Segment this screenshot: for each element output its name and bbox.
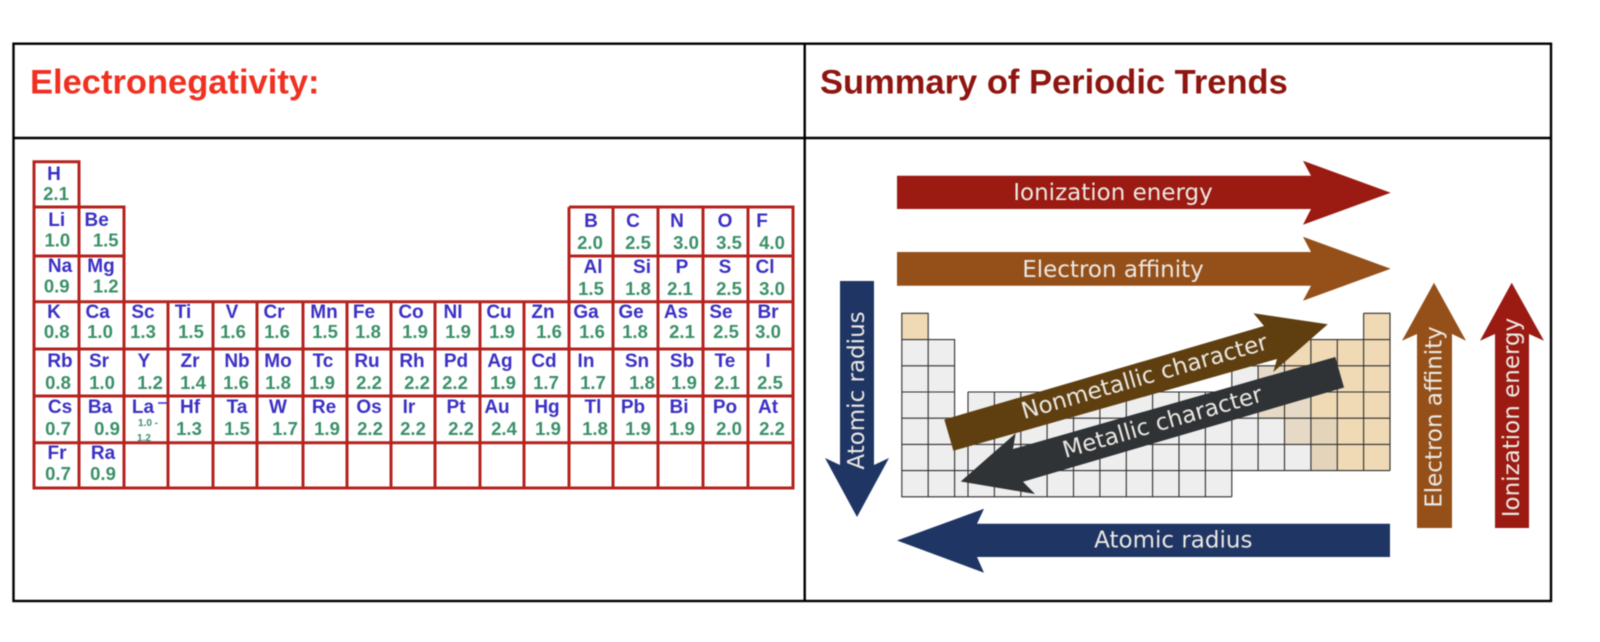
period 6 elements: 1.2 <box>137 433 151 444</box>
period 4 elements: Zn <box>531 302 555 323</box>
period 4 elements: 1.8 <box>355 321 381 342</box>
period 5 elements: Sb <box>670 351 694 372</box>
period 3 elements: 1.2 <box>93 276 119 297</box>
period 7 elements <box>45 443 116 484</box>
arrow: nonmetallic character <box>944 313 1328 451</box>
period 6 elements: 2.4 <box>491 418 518 439</box>
background periodic table grid <box>902 313 1390 497</box>
period 6 elements: Au <box>484 397 510 418</box>
period 3 elements: 1.5 <box>578 278 604 299</box>
period 4 elements: Se <box>709 302 733 323</box>
period 6 elements: 1.9 <box>669 418 695 439</box>
period 4 elements: Ti <box>175 302 191 323</box>
period 2 elements: O <box>718 211 732 232</box>
period 2 elements: Li <box>48 210 65 231</box>
period 4 elements: 1.5 <box>312 321 338 342</box>
period 6 elements <box>45 397 785 444</box>
period 6 elements: Po <box>713 397 737 418</box>
period 3 elements: 0.9 <box>44 276 70 297</box>
period 6 elements: Bi <box>670 397 688 418</box>
period 3 elements: 2.5 <box>716 278 742 299</box>
period 5 elements: 2.5 <box>757 372 783 393</box>
arrow: electron affinity vertical: Electron affinity <box>1422 326 1448 508</box>
period 5 elements: Ru <box>354 351 380 372</box>
period 5 elements: 1.0 <box>89 372 115 393</box>
period 5 elements: Sn <box>625 351 649 372</box>
period 2 elements: C <box>626 211 640 232</box>
period 4 elements: Ge <box>618 302 644 323</box>
period 6 elements: 2.0 <box>716 418 742 439</box>
period 2 elements: 4.0 <box>759 232 785 253</box>
period 3 elements: Al <box>584 257 602 278</box>
period 5 elements: Cd <box>531 351 557 372</box>
period 4 elements: NI <box>444 302 462 323</box>
period 4 elements: 0.8 <box>44 321 70 342</box>
period 2 elements: 3.0 <box>673 232 699 253</box>
heading: Summary of Periodic Trends: Summary of Periodic Trends <box>820 63 1288 101</box>
period 4 elements: Br <box>757 302 779 323</box>
arrow: atomic radius vertical: Atomic radius <box>844 311 870 470</box>
period 2 elements: 2.5 <box>625 232 651 253</box>
period 5 elements: In <box>578 351 594 372</box>
arrow: metallic character: Metallic character <box>1060 382 1266 464</box>
period 3 elements: 3.0 <box>759 278 785 299</box>
period 3 elements: 2.1 <box>667 278 693 299</box>
period 5 elements: 1.7 <box>533 372 559 393</box>
period 3 elements: P <box>676 257 689 278</box>
period 5 elements: Zr <box>180 351 200 372</box>
arrow: electron affinity vertical <box>1402 283 1466 528</box>
period 6 elements: 1.9 <box>625 418 651 439</box>
period 5 elements: 1.2 <box>137 372 163 393</box>
arrow: electron affinity horizontal: Electron affinity <box>1022 257 1204 283</box>
period 5 elements: 1.9 <box>490 372 516 393</box>
period 4 elements: 1.6 <box>579 321 605 342</box>
period 2 elements: N <box>670 211 684 232</box>
period 6 elements: Cs <box>48 397 72 418</box>
period 6 elements: 1.9 <box>535 418 561 439</box>
period 6 elements: 2.2 <box>400 418 426 439</box>
period 5 elements: 1.4 <box>180 372 207 393</box>
period 3 elements: Si <box>633 257 651 278</box>
panel: electronegativity periodic table <box>34 162 793 488</box>
period 5 elements: 0.8 <box>45 372 71 393</box>
period 2 elements: Be <box>85 210 109 231</box>
arrow: electron affinity horizontal <box>897 237 1391 301</box>
period 4 elements: 1.3 <box>130 321 156 342</box>
period 4 elements: 2.1 <box>669 321 695 342</box>
period 6 elements: Tl <box>585 397 601 418</box>
arrow: ionization energy horizontal: Ionization energy <box>1013 180 1213 206</box>
period 6 elements: 2.2 <box>357 418 383 439</box>
period 6 elements: 1.7 <box>272 418 298 439</box>
period 1 elements: 2.1 <box>43 183 69 204</box>
arrow: metallic character <box>961 357 1344 494</box>
period 5 elements: 1.9 <box>309 372 335 393</box>
period 6 elements: 2.2 <box>759 418 785 439</box>
period 7 elements: Fr <box>48 443 67 464</box>
period 4 elements: Cr <box>263 302 285 323</box>
period 6 elements: Ba <box>88 397 113 418</box>
period 6 elements: Ta <box>227 397 248 418</box>
period 5 elements: 2.1 <box>714 372 740 393</box>
period 4 elements: 1.6 <box>220 321 246 342</box>
period 6 elements: 1.0 - <box>138 418 158 429</box>
period 3 elements: 1.8 <box>625 278 651 299</box>
period 4 elements: 1.9 <box>445 321 471 342</box>
arrow: atomic radius horizontal <box>897 509 1390 573</box>
period 2 elements <box>44 210 785 253</box>
period 5 elements: Mo <box>264 351 292 372</box>
period 6 elements: La <box>132 397 155 418</box>
arrow: atomic radius horizontal: Atomic radius <box>1094 527 1252 553</box>
period 6 elements: 0.9 <box>94 418 120 439</box>
period 4 elements: 1.6 <box>264 321 290 342</box>
period 5 elements: 1.7 <box>580 372 606 393</box>
period 5 elements: 2.2 <box>404 372 430 393</box>
period 4 elements: V <box>226 302 239 323</box>
period 5 elements: Te <box>715 351 735 372</box>
period 3 elements: Mg <box>87 256 115 277</box>
period 4 elements: Co <box>398 302 424 323</box>
arrow: atomic radius vertical <box>825 281 889 517</box>
period 5 elements: Nb <box>224 351 250 372</box>
period 4 elements: Ga <box>573 302 599 323</box>
period 6 elements: Pb <box>621 397 645 418</box>
period 4 elements: 1.5 <box>178 321 204 342</box>
period 6 elements: 0.7 <box>45 418 71 439</box>
period 5 elements: 2.2 <box>356 372 382 393</box>
period 4 elements: K <box>47 302 61 323</box>
period 5 elements: Y <box>138 351 151 372</box>
period 4 elements: 1.8 <box>622 321 648 342</box>
panel: summary of periodic trends <box>825 161 1544 573</box>
period 6 elements: W <box>269 397 287 418</box>
period 6 elements: 2.2 <box>448 418 474 439</box>
period 5 elements: Tc <box>313 351 334 372</box>
period 4 elements: Mn <box>310 302 338 323</box>
table grid lines <box>34 162 793 488</box>
period 5 elements: Pd <box>444 351 468 372</box>
period 6 elements: 1.8 <box>582 418 608 439</box>
period 4 elements: Ca <box>86 302 110 323</box>
period 1 elements: H <box>47 164 61 185</box>
heading: Electronegativity: Electronegativity: <box>30 63 320 101</box>
arrow: ionization energy vertical: Ionization energy <box>1499 318 1525 517</box>
period 5 elements: 1.9 <box>671 372 697 393</box>
period 5 elements: Rb <box>47 351 73 372</box>
period 4 elements: Sc <box>131 302 155 323</box>
period 5 elements: 1.8 <box>629 372 655 393</box>
period 2 elements: B <box>584 211 598 232</box>
period 6 elements: 1.3 <box>176 418 202 439</box>
period 7 elements: 0.9 <box>90 463 116 484</box>
period 4 elements: 3.0 <box>755 321 781 342</box>
period 2 elements: 3.5 <box>716 232 742 253</box>
arrow: ionization energy horizontal <box>897 161 1391 225</box>
period 5 elements: I <box>765 351 771 372</box>
period 5 elements: Ag <box>487 351 513 372</box>
arrow: ionization energy vertical <box>1480 283 1544 528</box>
period 4 elements: Cu <box>486 302 512 323</box>
period 4 elements: 1.9 <box>489 321 515 342</box>
period 5 elements: 2.2 <box>442 372 468 393</box>
period 3 elements: Cl <box>756 257 774 278</box>
period 6 elements: 1.5 <box>224 418 250 439</box>
period 6 elements: Pt <box>446 397 466 418</box>
period 6 elements: 1.9 <box>314 418 340 439</box>
period 5 elements: 1.6 <box>223 372 249 393</box>
period 4 elements: Fe <box>353 302 375 323</box>
period 6 elements: At <box>758 397 779 418</box>
period 2 elements: 1.0 <box>44 230 70 251</box>
arrow: nonmetallic character: Nonmetallic character <box>1019 330 1271 425</box>
period 5 elements: 1.8 <box>265 372 291 393</box>
period 5 elements: Sr <box>89 351 110 372</box>
period 1 elements <box>43 164 69 204</box>
period 6 elements: Ir <box>403 397 416 418</box>
period 4 elements <box>44 302 781 342</box>
period 7 elements: 0.7 <box>45 463 71 484</box>
period 2 elements: 2.0 <box>577 232 603 253</box>
period 6 elements: Hf <box>180 397 201 418</box>
period 6 elements: Hg <box>534 397 560 418</box>
period 4 elements: As <box>664 302 688 323</box>
period 2 elements: 1.5 <box>93 230 119 251</box>
period 4 elements: 2.5 <box>713 321 739 342</box>
period 3 elements <box>44 256 785 299</box>
period 2 elements: F <box>756 211 768 232</box>
period 4 elements: 1.9 <box>402 321 428 342</box>
period 3 elements: S <box>719 257 731 278</box>
period 4 elements: 1.0 <box>87 321 113 342</box>
period 6 elements: Re <box>312 397 336 418</box>
period 5 elements: Rh <box>399 351 425 372</box>
period 5 elements <box>45 351 783 393</box>
period 7 elements: Ra <box>91 443 116 464</box>
period 3 elements: Na <box>48 256 73 277</box>
period 4 elements: 1.6 <box>536 321 562 342</box>
period 6 elements: Os <box>356 397 382 418</box>
